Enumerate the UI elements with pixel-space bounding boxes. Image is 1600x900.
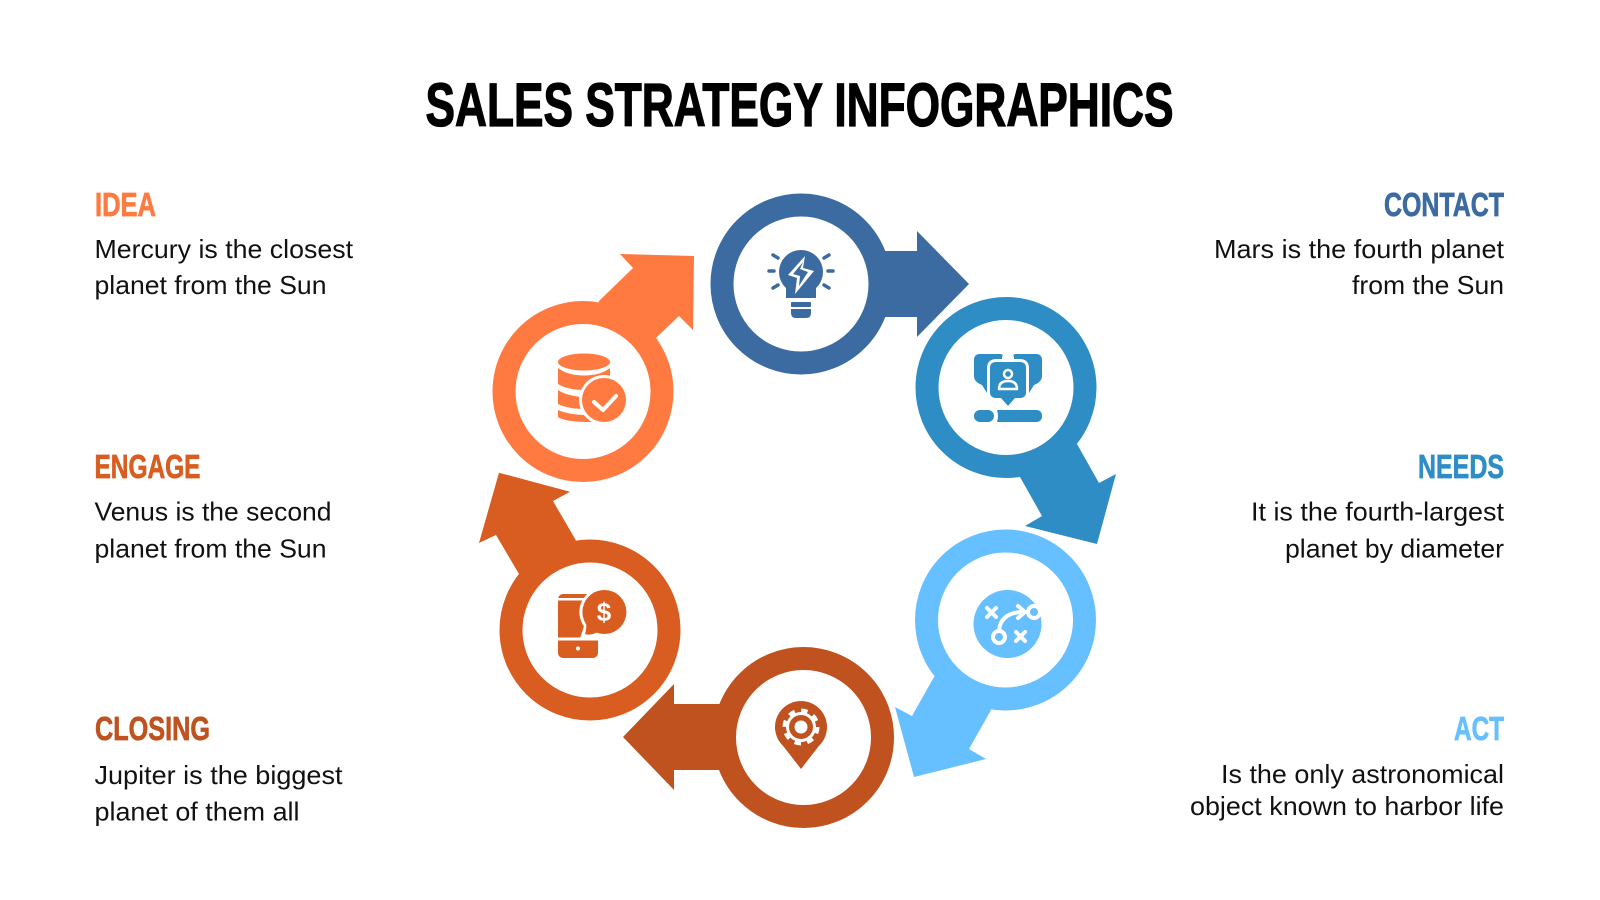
icon: strategy play bbox=[974, 590, 1042, 658]
step: mid blue ring and arrow bbox=[927, 308, 1116, 544]
ring: light blue bbox=[926, 541, 1084, 699]
icon: database check bbox=[558, 354, 629, 425]
description: contact: Mars is the fourth planet bbox=[1214, 234, 1505, 264]
icon: phone with dollar bubble: $ bbox=[597, 597, 612, 627]
text block: idea bbox=[94, 186, 354, 300]
step: light orange ring and arrow bbox=[504, 254, 694, 470]
ring: light orange bbox=[504, 312, 662, 470]
step: light blue ring and arrow bbox=[895, 541, 1084, 777]
icon: light bulb bbox=[769, 250, 833, 318]
step: dark blue ring and arrow bbox=[722, 205, 969, 363]
heading: contact: CONTACT bbox=[1384, 186, 1504, 223]
icon: contact bubbles bbox=[974, 354, 1042, 422]
text block: contact bbox=[1214, 186, 1505, 300]
heading: act: ACT bbox=[1454, 710, 1504, 747]
text block: act bbox=[1190, 710, 1504, 821]
arrow: dark blue bbox=[801, 231, 969, 337]
heading: needs: NEEDS bbox=[1418, 448, 1504, 485]
step: dark orange ring and arrow bbox=[623, 658, 882, 816]
title: SALES STRATEGY INFOGRAPHICS bbox=[426, 71, 1174, 139]
arrow: light blue bbox=[895, 620, 1005, 777]
icon: phone with dollar bubble bbox=[556, 587, 629, 658]
heading: engage: ENGAGE bbox=[94, 448, 200, 485]
ring: orange bbox=[511, 551, 669, 709]
heading: idea: IDEA bbox=[95, 186, 156, 223]
ring: dark blue bbox=[722, 205, 880, 363]
description: idea: Mercury is the closest bbox=[94, 234, 354, 264]
description: needs: It is the fourth-largest bbox=[1251, 496, 1505, 526]
text block: needs bbox=[1251, 448, 1505, 564]
text block: closing bbox=[94, 710, 343, 826]
description: act: Is the only astronomical bbox=[1221, 759, 1504, 789]
text block: engage bbox=[94, 448, 332, 564]
arrow: orange bbox=[479, 473, 590, 630]
arrow: dark orange bbox=[623, 684, 803, 790]
ring: dark orange bbox=[724, 658, 882, 816]
description: engage: Venus is the second bbox=[94, 496, 332, 526]
description: act: object known to harbor life bbox=[1190, 791, 1504, 821]
ring: mid blue bbox=[927, 308, 1085, 466]
description: closing: planet of them all bbox=[94, 796, 300, 826]
arrow: mid blue bbox=[1006, 387, 1116, 544]
description: engage: planet from the Sun bbox=[94, 534, 326, 564]
description: contact: from the Sun bbox=[1352, 270, 1504, 300]
description: needs: planet by diameter bbox=[1285, 534, 1504, 564]
icon: gear location pin bbox=[775, 701, 827, 769]
heading: closing: CLOSING bbox=[95, 710, 210, 747]
description: idea: planet from the Sun bbox=[94, 270, 326, 300]
step: orange ring and arrow bbox=[479, 473, 669, 709]
arrow: light orange bbox=[583, 254, 694, 391]
description: closing: Jupiter is the biggest bbox=[94, 760, 343, 790]
